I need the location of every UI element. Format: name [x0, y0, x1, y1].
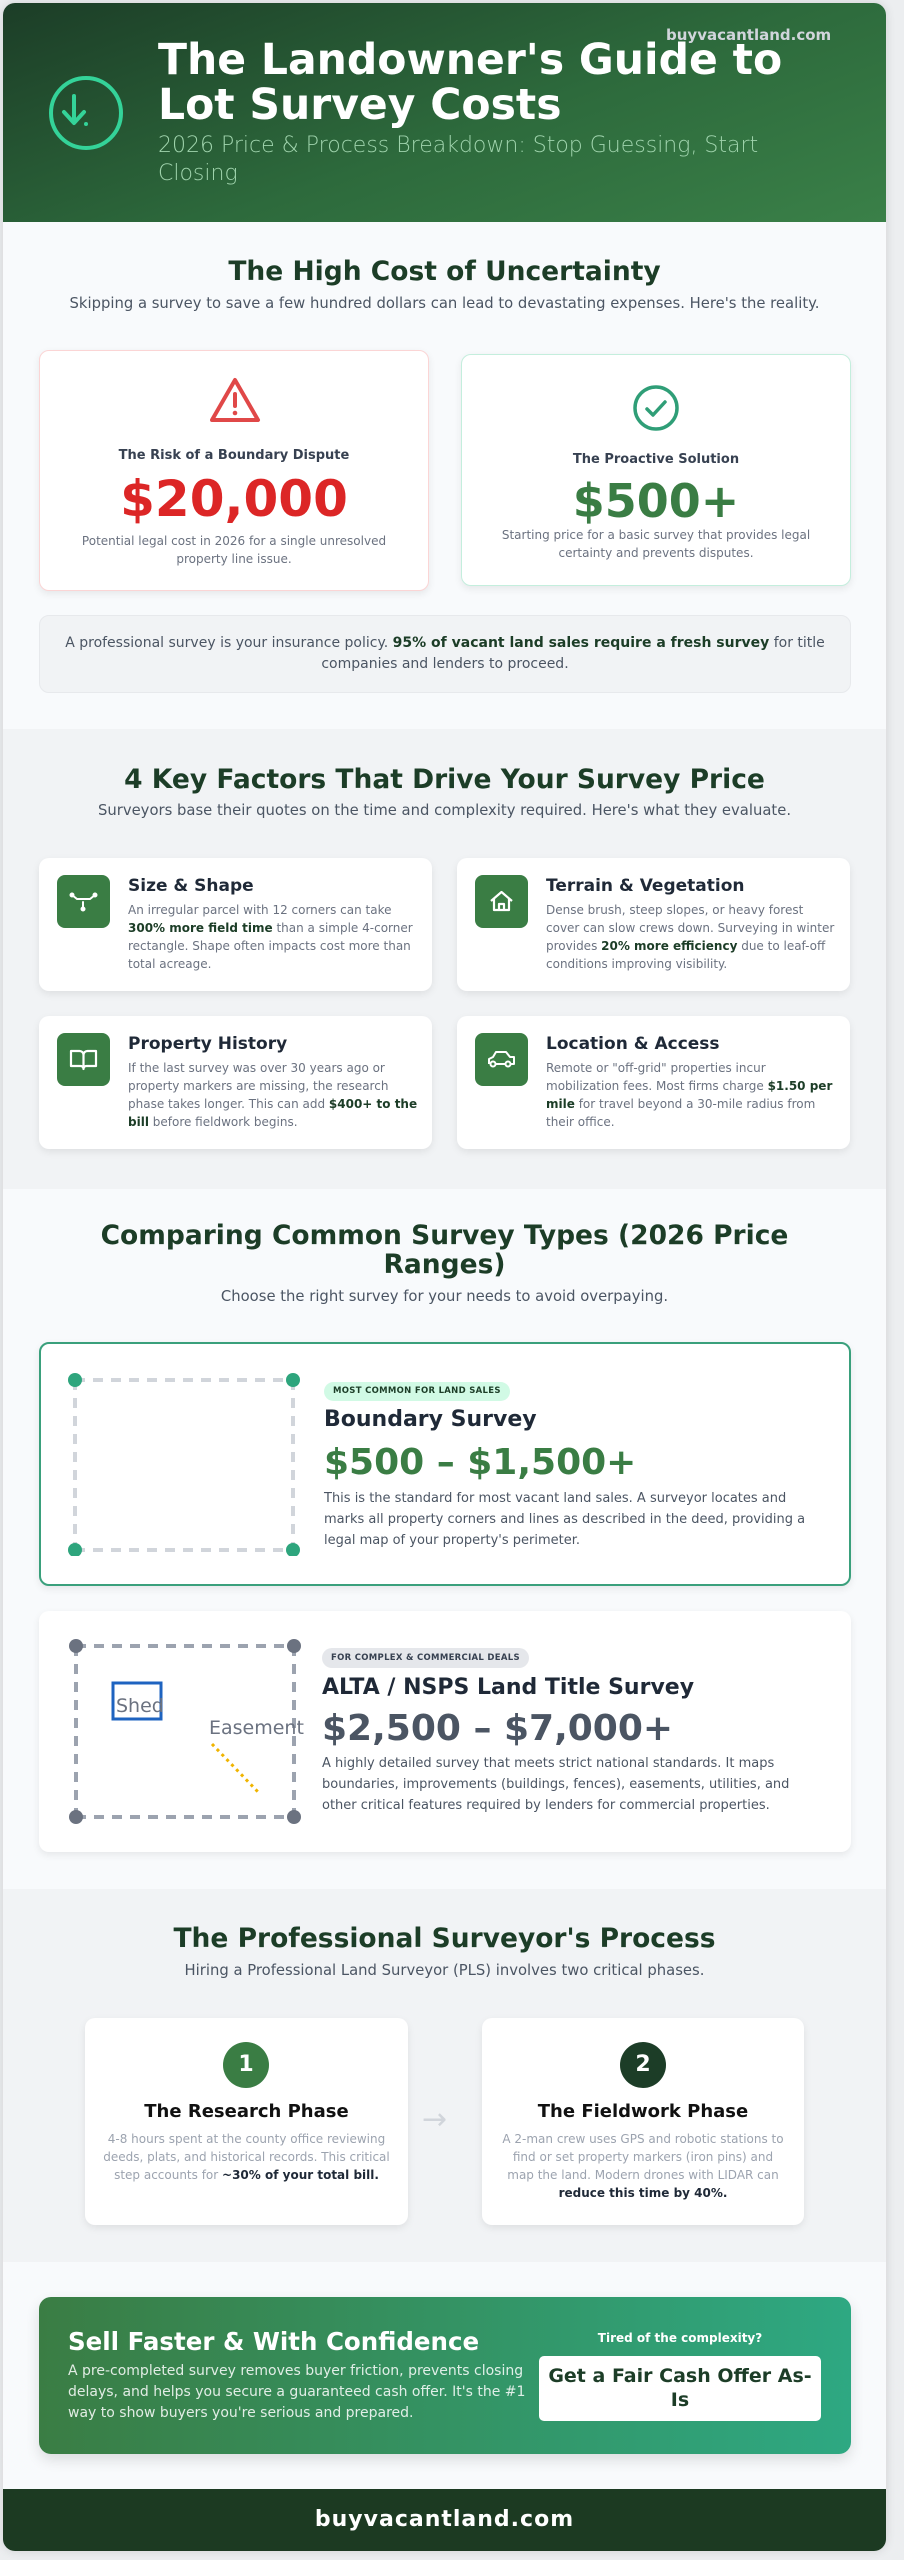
- text: If the last survey was over 30 years ago or property markers are missing, the research phase takes longer. This can add $400+ to the bill before fieldwork begins.: [128, 1061, 417, 1129]
- badge: [322, 1648, 529, 1668]
- CTA button: [539, 2356, 821, 2421]
- card: risk: [39, 350, 429, 591]
- value: $500+: [573, 474, 739, 528]
- footer: buyvacantland.com: [315, 2507, 574, 2532]
- callout: [39, 615, 851, 693]
- heading: The Professional Surveyor's Process: [173, 1923, 716, 1954]
- label: The Risk of a Boundary Dispute: [119, 448, 349, 463]
- value: $20,000: [120, 470, 348, 528]
- badge: FOR COMPLEX & COMMERCIAL DEALS: [331, 1653, 520, 1663]
- step number: [620, 2042, 666, 2088]
- heading: The High Cost of Uncertainty: [228, 256, 661, 287]
- diagram: ALTA: Easement: [209, 1717, 304, 1739]
- step text: 4-8 hours spent at the county office reviewing deeds, plats, and historical records. This critical step accounts for ~30% of your total bill.: [103, 2132, 390, 2182]
- header: [3, 3, 886, 222]
- subheading: Choose the right survey for your needs to avoid overpaying.: [221, 1288, 668, 1305]
- diagram: ALTA: Shed: [116, 1695, 164, 1717]
- card: boundary survey: [39, 1342, 851, 1586]
- step number: [223, 2042, 269, 2088]
- card: ALTA survey: [39, 1611, 851, 1852]
- CTA button: Get a Fair Cash Offer As-Is: [548, 2365, 812, 2411]
- title: Property History: [128, 1034, 287, 1054]
- description: A highly detailed survey that meets strict national standards. It maps boundaries, improvements (buildings, fences), easements, utilities, and other critical features required by lenders for commercial properties.: [322, 1756, 789, 1813]
- arrow: →: [422, 2102, 447, 2137]
- desc: Starting price for a basic survey that provides legal certainty and prevents disputes.: [502, 528, 810, 560]
- section: CTA: [3, 2262, 886, 2489]
- description: This is the standard for most vacant land sales. A surveyor locates and marks all property corners and lines as described in the deed, providing a legal map of your property's perimeter.: [324, 1491, 805, 1548]
- step number: 2: [635, 2052, 651, 2077]
- icon: book: [57, 1033, 110, 1086]
- desc: Potential legal cost in 2026 for a single unresolved property line issue.: [82, 534, 386, 566]
- step number: 1: [238, 2052, 254, 2077]
- badge: MOST COMMON FOR LAND SALES: [333, 1386, 501, 1396]
- CTA text: A pre-completed survey removes buyer friction, prevents closing delays, and helps you secure a guaranteed cash offer. It's the #1 way to show buyers you're serious and prepared.: [68, 2363, 525, 2421]
- title: Size & Shape: [128, 876, 254, 896]
- CTA prompt: Tired of the complexity?: [598, 2331, 762, 2345]
- text: Remote or "off-grid" properties incur mobilization fees. Most firms charge $1.50 per mile for travel beyond a 30-mile radius from their office.: [546, 1061, 832, 1129]
- CTA heading: Sell Faster & With Confidence: [68, 2327, 479, 2356]
- section: high cost of uncertainty: [3, 222, 886, 729]
- title: ALTA / NSPS Land Title Survey: [322, 1675, 694, 1700]
- header site name: buyvacantland.com: [666, 26, 831, 44]
- icon: car: [475, 1033, 528, 1086]
- card: property history: [39, 1016, 432, 1149]
- icon: house: [475, 875, 528, 928]
- title: Terrain & Vegetation: [546, 876, 744, 896]
- card: terrain: [457, 858, 850, 991]
- price: $500 – $1,500+: [324, 1442, 636, 1483]
- step title: The Research Phase: [144, 2101, 349, 2122]
- text: Dense brush, steep slopes, or heavy forest cover can slow crews down. Surveying in winter provides 20% more efficiency due to leaf-off conditions improving visibility.: [546, 903, 834, 971]
- step title: The Fieldwork Phase: [538, 2101, 748, 2122]
- text: An irregular parcel with 12 corners can take 300% more field time than a simple 4-corner rectangle. Shape often impacts cost more than total acreage.: [128, 903, 413, 971]
- section: survey types: [3, 1189, 886, 1889]
- heading: Comparing Common Survey Types (2026 Price Ranges): [101, 1220, 788, 1280]
- card: solution: [461, 354, 851, 586]
- subheading: Surveyors base their quotes on the time and complexity required. Here's what they evaluate.: [98, 802, 791, 819]
- diagram: ALTA: [69, 1639, 304, 1824]
- callout: A professional survey is your insurance policy. 95% of vacant land sales require a fresh survey for title companies and lenders to proceed.: [65, 635, 825, 672]
- card: size & shape: [39, 858, 432, 991]
- badge: [324, 1382, 510, 1401]
- footer: [3, 2489, 886, 2551]
- icon: download circle: [49, 76, 123, 150]
- section: 4 key factors: [3, 729, 886, 1189]
- step 2 card: [482, 2018, 804, 2225]
- subheading: Skipping a survey to save a few hundred dollars can lead to devastating expenses. Here's the reality.: [70, 295, 819, 312]
- step text: A 2-man crew uses GPS and robotic stations to find or set property markers (iron pins) and map the land. Modern drones with LIDAR can reduce this time by 40%.: [502, 2132, 784, 2200]
- CTA banner: [39, 2297, 851, 2454]
- title: The Landowner's Guide to: [158, 36, 782, 85]
- section: process: [3, 1889, 886, 2262]
- card: location: [457, 1016, 850, 1149]
- icon: check circle: [633, 385, 679, 431]
- icon: warning: [210, 378, 260, 422]
- diagram: boundary: [68, 1373, 300, 1556]
- label: The Proactive Solution: [573, 452, 739, 467]
- subheading: Hiring a Professional Land Surveyor (PLS) involves two critical phases.: [185, 1962, 704, 1979]
- icon: shape: [57, 875, 110, 928]
- title: Lot Survey Costs: [158, 81, 562, 130]
- heading: 4 Key Factors That Drive Your Survey Price: [124, 764, 765, 795]
- price: $2,500 – $7,000+: [322, 1708, 673, 1749]
- title: [158, 36, 782, 130]
- title: Location & Access: [546, 1034, 720, 1054]
- subtitle: 2026 Price & Process Breakdown: Stop Guessing, Start Closing: [158, 133, 758, 186]
- title: Boundary Survey: [324, 1407, 537, 1432]
- step 1 card: [85, 2018, 408, 2225]
